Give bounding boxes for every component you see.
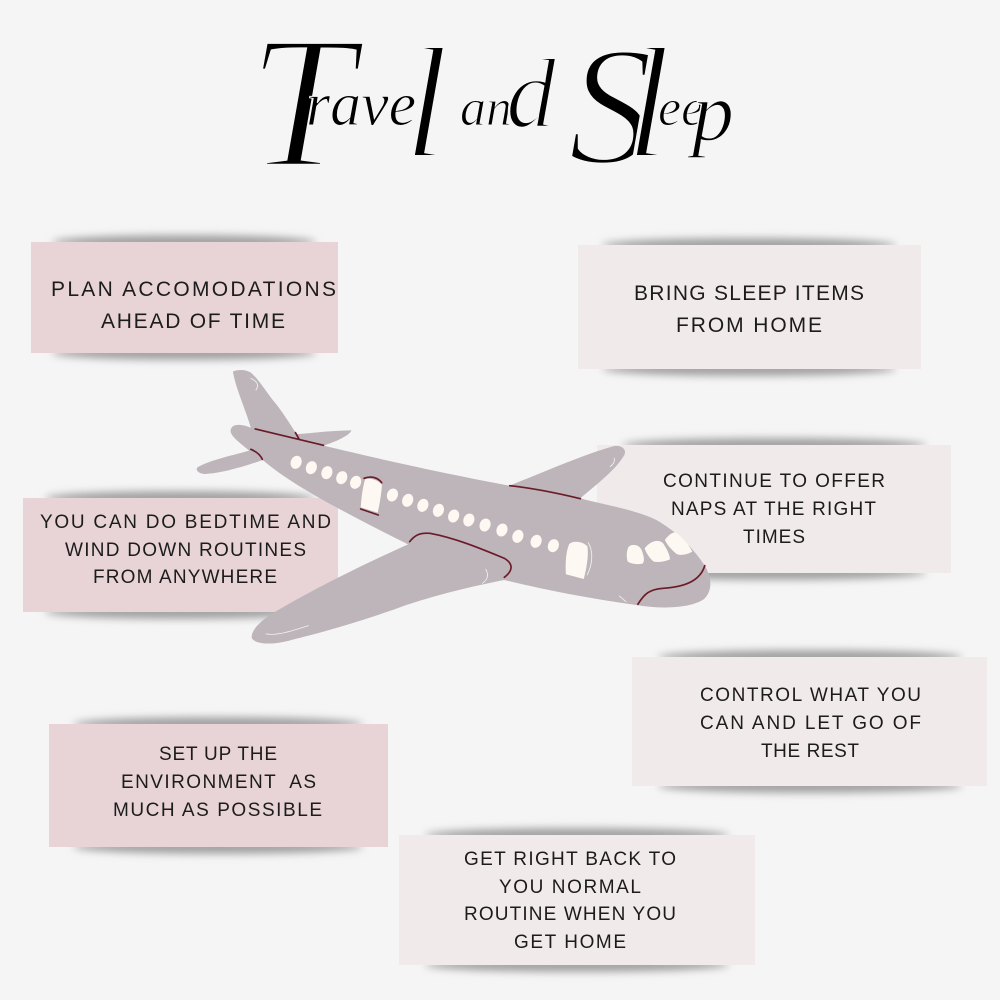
title: d [506,38,557,149]
panel: back to routine: ROUTINE WHEN YOU [464,904,676,925]
title: l [626,14,670,192]
white highlights [251,378,626,634]
title: rave [306,71,416,139]
panel: plan accommodations [31,235,338,360]
airplane illustration [197,370,710,644]
panel: control what you can: THE REST [761,741,859,762]
panel: bedtime routines: WIND DOWN ROUTINES [65,540,306,561]
panel: bedtime routines: YOU CAN DO BEDTIME AND [40,512,331,533]
panel: control what you can [632,650,987,793]
cockpit windows [627,532,692,564]
panel: continue naps: NAPS AT THE RIGHT [671,499,876,520]
panel: back to routine: GET HOME [514,932,626,953]
title: l [404,14,448,192]
panel: bring sleep items: BRING SLEEP ITEMS [634,282,864,305]
panel: control what you can: CAN AND LET GO OF [700,713,921,734]
title: T [248,0,365,208]
panel: plan accommodations: PLAN ACCOMODATIONS [51,278,336,301]
panel: plan accommodations: AHEAD OF TIME [101,310,285,333]
panel: continue naps: CONTINUE TO OFFER [663,471,885,492]
panel: continue naps: TIMES [743,527,805,548]
panel: set up environment [49,717,388,854]
panel: back to routine [399,828,755,972]
plane body, wings and tail [197,370,710,644]
panel: set up environment: SET UP THE [159,744,277,765]
panel: continue naps [597,438,951,580]
panel: bedtime routines [23,491,338,619]
panel: set up environment: ENVIRONMENT AS [121,772,316,793]
panel: control what you can: CONTROL WHAT YOU [700,685,921,706]
panel: set up environment: MUCH AS POSSIBLE [113,800,322,821]
title: ee [658,80,704,137]
title: p [687,66,734,159]
passenger windows [289,454,561,554]
panel: back to routine: YOU NORMAL [499,877,641,898]
title: an [460,80,512,137]
panel: bring sleep items: FROM HOME [676,314,822,337]
panel: bring sleep items [578,238,921,376]
panel: back to routine: GET RIGHT BACK TO [464,849,676,870]
title: S [568,12,653,200]
panel: bedtime routines: FROM ANYWHERE [93,567,277,588]
doors [361,479,588,579]
maroon accent lines [251,429,705,604]
